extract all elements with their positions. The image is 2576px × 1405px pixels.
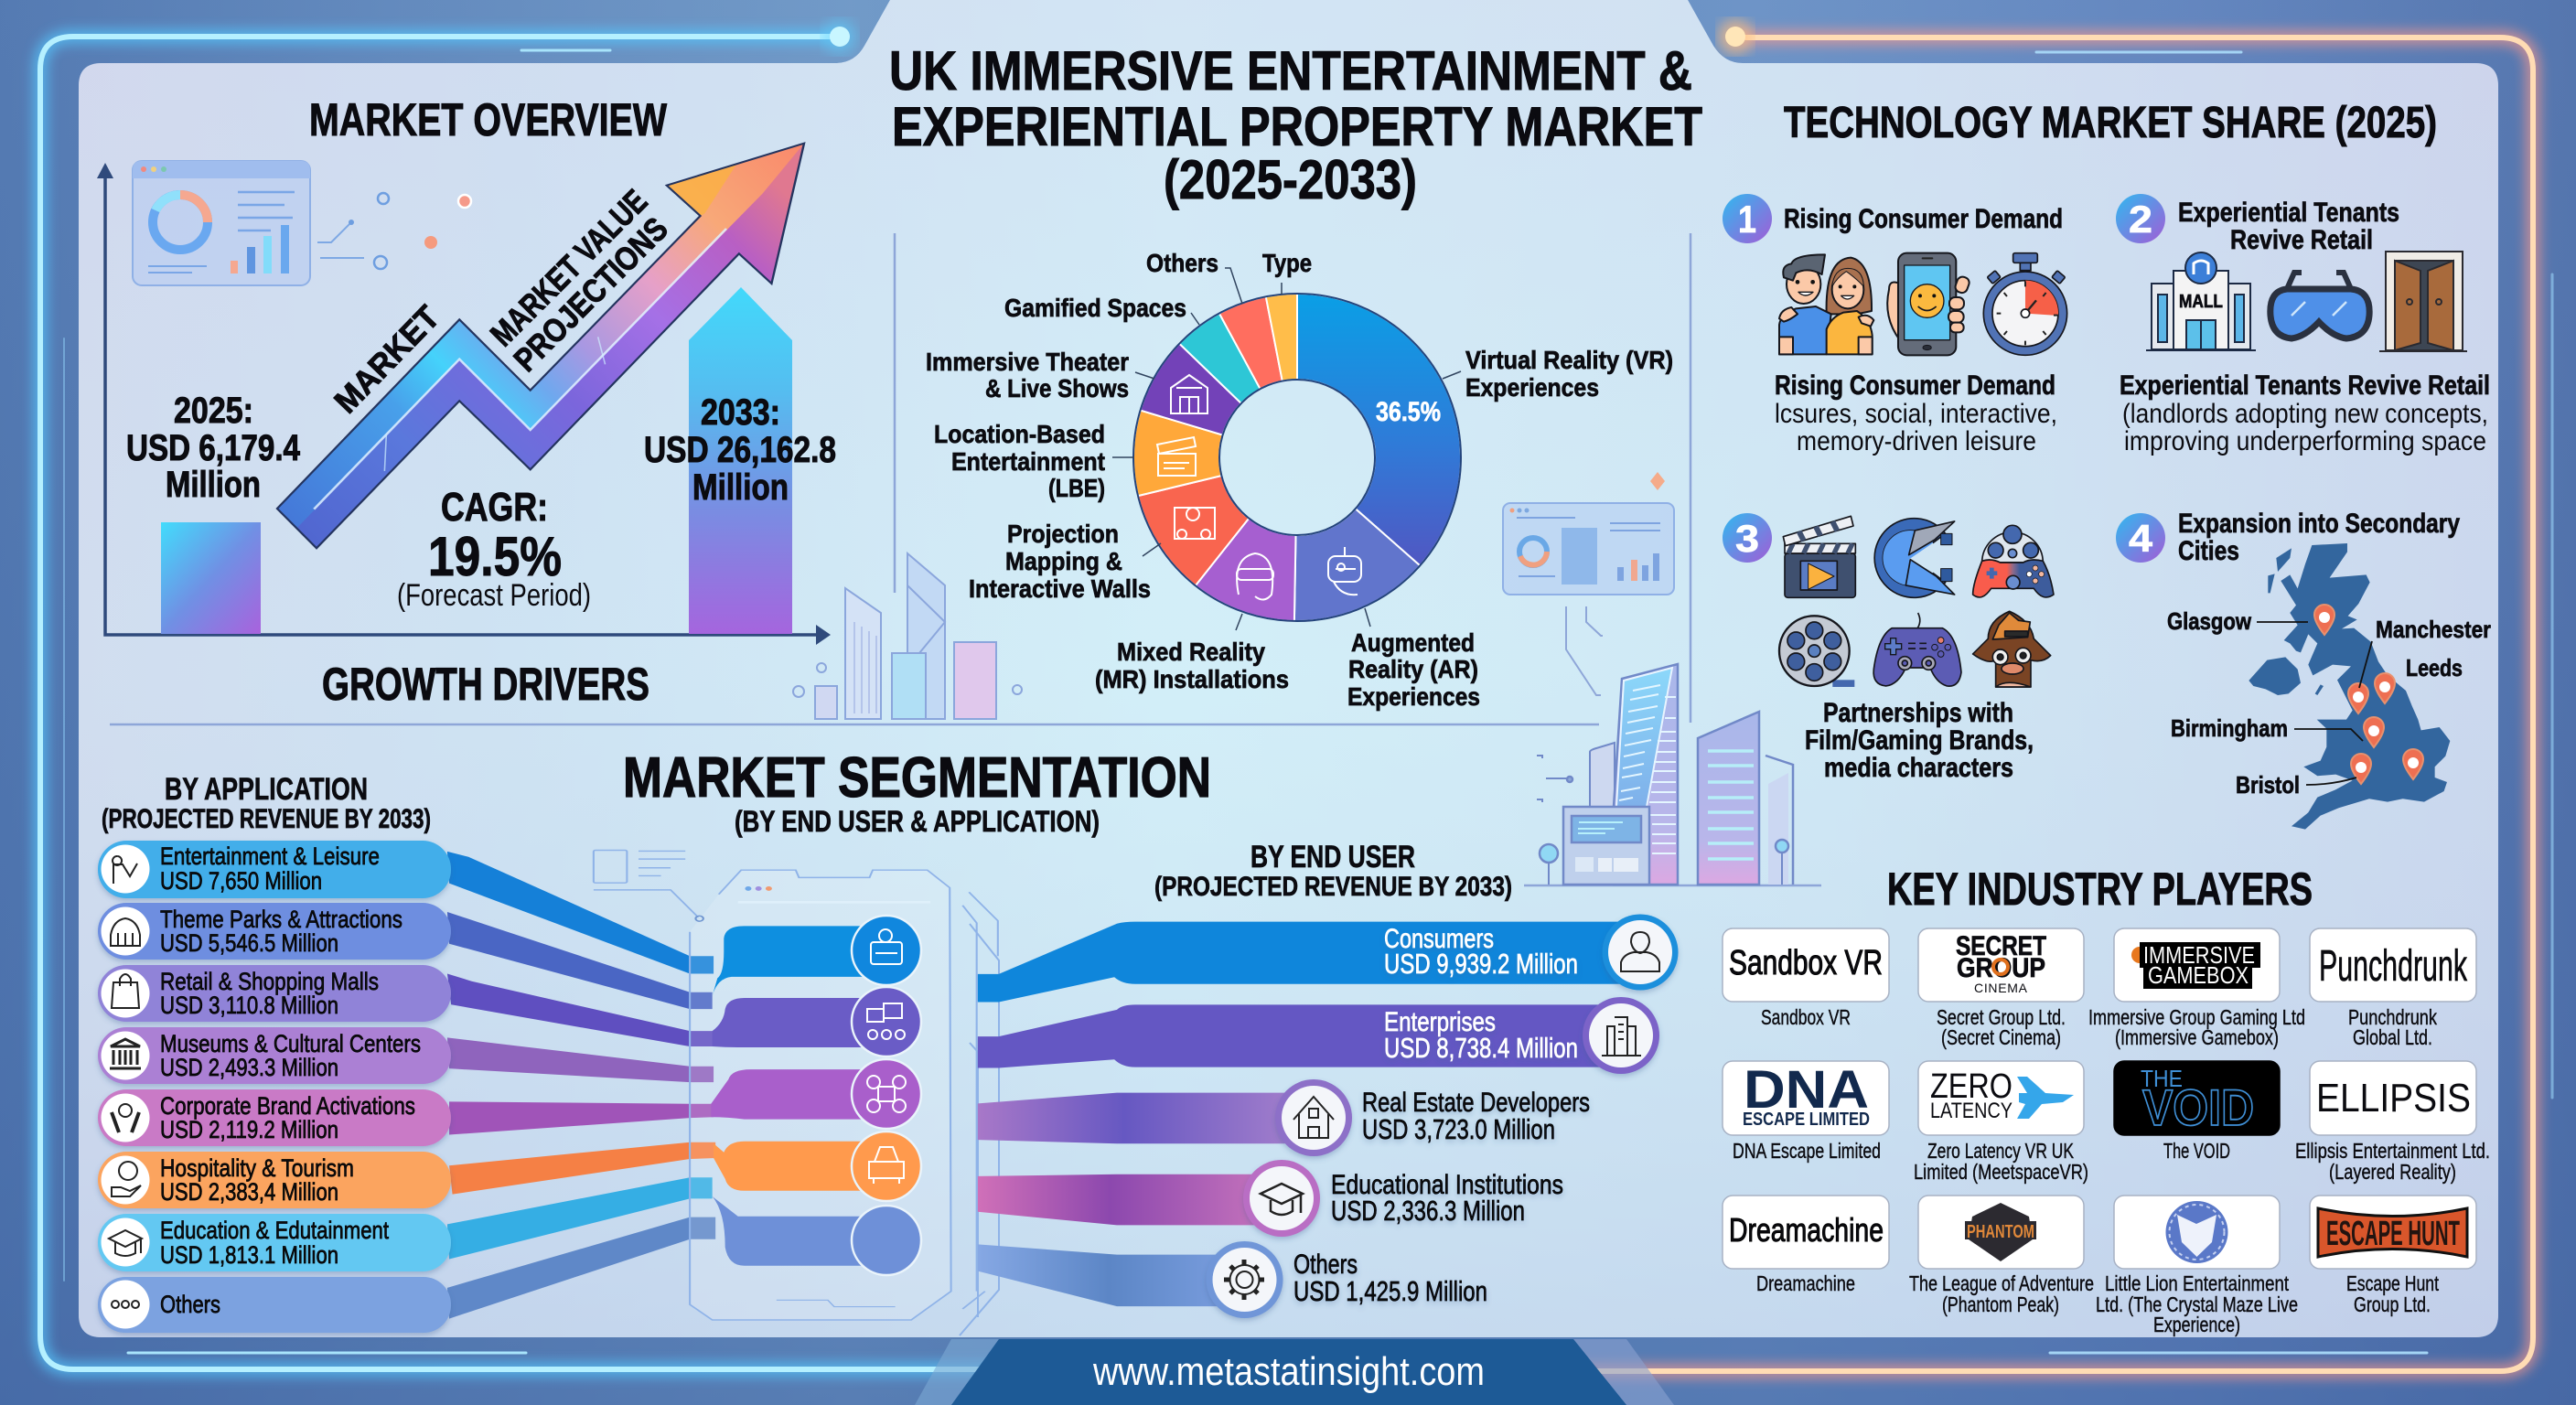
end user: educational institutions: Educational Institutions	[1331, 1170, 1563, 1200]
application pill: education & edutainment	[98, 1214, 451, 1271]
logo: Immersive Gamebox: GAMEBOX	[2148, 961, 2249, 989]
application pill: education & edutainment: USD 1,813.1 Million	[160, 1241, 338, 1269]
heading: by application: BY APPLICATION	[165, 772, 368, 807]
donut labels: Reality (AR)	[1348, 655, 1478, 683]
logo: Escape Hunt	[2318, 1208, 2467, 1257]
application pill: corporate brand activations	[98, 1089, 451, 1146]
heading: by end user: BY END USER	[1250, 840, 1415, 874]
value: 36.5%: 36.5%	[1376, 397, 1441, 427]
player names: Experience)	[2153, 1313, 2240, 1336]
player names: Escape Hunt	[2346, 1271, 2439, 1295]
logo: Phantom Peak	[1965, 1203, 2036, 1261]
dividers	[110, 233, 1821, 885]
player names: Group Ltd.	[2354, 1292, 2431, 1316]
player names: (Immersive Gamebox)	[2115, 1025, 2279, 1049]
arrow labels: MARKET VALUE	[483, 182, 654, 353]
heading: key industry players: KEY INDUSTRY PLAYERS	[1887, 863, 2313, 915]
logo: Secret Group: GROUP	[1957, 953, 2045, 983]
hub bar 1	[713, 926, 886, 996]
text: rising consumer demand: memory-driven leisure	[1797, 426, 2036, 456]
heading: experiential tenants	[2178, 198, 2399, 255]
text: experiential tenants	[2120, 370, 2490, 456]
panel: type donut chart	[926, 249, 1673, 711]
CAGR callout: CAGR:	[441, 485, 548, 530]
badge 2: 2	[2129, 198, 2152, 241]
donut labels: Immersive Theater	[926, 348, 1129, 376]
heading: by end user	[1154, 840, 1512, 902]
arrow labels: MARKET	[327, 298, 446, 420]
end user: others	[1206, 1241, 1487, 1318]
chart axes	[97, 163, 831, 645]
arrow labels	[327, 182, 675, 420]
icon: door	[2379, 252, 2467, 351]
heading: by end user: (PROJECTED REVENUE BY 2033)	[1154, 872, 1512, 902]
map labels: Leeds	[2406, 654, 2463, 681]
icon: VR goggles	[2270, 273, 2369, 338]
end user: enterprises	[1384, 997, 1659, 1074]
donut labels: (MR) Installations	[1095, 665, 1289, 693]
application pill: others: Others	[160, 1291, 220, 1318]
logo: Immersive Gamebox: IMMERSIVE	[2143, 941, 2255, 969]
player names: Dreamachine	[1756, 1271, 1855, 1295]
map pins	[2314, 605, 2423, 784]
application pill: theme parks & attractions: USD 5,546.5 Million	[160, 929, 338, 957]
panel: technology market share	[1723, 99, 2491, 830]
text: partnerships: Partnerships with	[1823, 698, 2013, 728]
map labels: Bristol	[2236, 771, 2300, 799]
heading: expansion into secondary cities	[2178, 509, 2460, 566]
bar: 2025	[161, 522, 261, 634]
hub circles	[852, 916, 921, 1275]
end user: consumers: USD 9,939.2 Million	[1384, 948, 1578, 980]
2025 value	[126, 391, 301, 505]
application pill: museums & cultural centers	[98, 1027, 451, 1084]
application pill: hospitality & tourism: Hospitality & Tourism	[160, 1154, 354, 1182]
donut labels: Projection	[1007, 520, 1119, 548]
map labels: Birmingham	[2171, 714, 2288, 742]
application pill: museums & cultural centers: Museums & Cultural Centers	[160, 1030, 421, 1057]
logo: Zero Latency: ZERO	[1930, 1067, 2012, 1106]
player names: Zero Latency VR UK	[1927, 1139, 2074, 1163]
application pill: theme parks & attractions	[98, 903, 451, 960]
player names: Limited (MeetspaceVR)	[1914, 1160, 2088, 1184]
logo: Phantom Peak: PHANTOM	[1967, 1222, 2034, 1242]
logo: Sandbox VR: Sandbox VR	[1729, 944, 1883, 982]
text: partnerships	[1805, 698, 2034, 783]
heading: experiential tenants: Experiential Tenants	[2178, 198, 2399, 228]
dashboard illustration: right	[1503, 472, 1674, 695]
connector ribbons: left	[447, 852, 715, 1319]
donut labels: Mapping &	[1005, 547, 1122, 575]
heading: technology market share: TECHNOLOGY MARKET SHARE (2025)	[1784, 99, 2437, 147]
hub bar 5	[713, 1196, 886, 1266]
end user: enterprises: USD 8,738.4 Million	[1384, 1032, 1578, 1064]
end user: others: USD 1,425.9 Million	[1293, 1275, 1487, 1307]
application pill: education & edutainment: Education & Edutainment	[160, 1217, 389, 1244]
application pill: hospitality & tourism: USD 2,383,4 Million	[160, 1178, 338, 1206]
heading: market segmentation: MARKET SEGMENTATION	[623, 746, 1211, 810]
player names: Sandbox VR	[1761, 1005, 1851, 1029]
logo: Escape Hunt: ESCAPE HUNT	[2326, 1215, 2460, 1253]
player names: The League of Adventure	[1909, 1271, 2094, 1295]
2033 value: 2033:	[701, 392, 780, 433]
UK map	[2249, 543, 2450, 830]
donut labels: Augmented	[1351, 628, 1475, 657]
end user: real estate developers	[1275, 1079, 1590, 1156]
icon: gamepad	[1873, 613, 1961, 686]
end user: educational institutions: USD 2,336.3 Million	[1331, 1195, 1525, 1227]
2033 value: Million	[692, 467, 789, 508]
CAGR callout	[397, 485, 591, 613]
badge 4	[2116, 513, 2165, 563]
icon: blue crescent logo	[1874, 519, 1955, 597]
icon: couple	[1779, 254, 1873, 354]
heading: expansion into secondary cities: Cities	[2178, 536, 2239, 566]
heading: rising consumer demand: Rising Consumer Demand	[1784, 204, 2063, 234]
badge 4: 4	[2129, 517, 2153, 560]
city illustration: right	[1537, 664, 1793, 885]
icon: character	[1973, 611, 2051, 687]
arrow: rising market trend	[277, 144, 804, 548]
application pill: corporate brand activations: Corporate Brand Activations	[160, 1092, 415, 1120]
2025 value: Million	[166, 465, 261, 505]
right hub outline	[960, 924, 999, 1335]
player names: Immersive Group Gaming Ltd	[2088, 1005, 2305, 1029]
icon: clapperboard	[1783, 516, 1855, 597]
donut labels: Interactive Walls	[969, 574, 1151, 603]
panel: key industry players	[1723, 863, 2490, 1336]
hub bar 2	[713, 998, 886, 1047]
logo: Immersive Gamebox	[2131, 941, 2260, 989]
end user: others: Others	[1293, 1249, 1358, 1280]
end user: real estate developers: USD 3,723.0 Million	[1362, 1113, 1555, 1145]
title: (2025-2033)	[1164, 149, 1417, 210]
end user ribbons	[978, 922, 1624, 1306]
text: partnerships: Film/Gaming Brands,	[1805, 725, 2034, 756]
map labels: Glasgow	[2167, 607, 2252, 635]
application pill: entertainment & leisure: Entertainment & Leisure	[160, 842, 380, 870]
end user: consumers	[1384, 915, 1678, 990]
CAGR callout: 19.5%	[428, 526, 562, 587]
heading: expansion into secondary cities: Expansion into Secondary	[2178, 509, 2460, 539]
donut labels: Experiences	[1465, 373, 1599, 402]
logo: DNA Escape: DNA	[1744, 1060, 1869, 1120]
donut labels: Type	[1262, 249, 1312, 277]
application pill: theme parks & attractions: Theme Parks & Attractions	[160, 906, 402, 933]
logo: The VOID: VOID	[2142, 1078, 2254, 1136]
icon: game controller dome	[1973, 525, 2054, 597]
donut icons	[1157, 375, 1361, 600]
leader lines	[1112, 268, 1461, 630]
player names: (Phantom Peak)	[1942, 1292, 2059, 1316]
map leader lines	[2257, 622, 2372, 785]
2025 value: USD 6,179.4	[126, 428, 301, 468]
panel: market segmentation	[98, 746, 1678, 1335]
heading: market segmentation: (BY END USER & APPLICATION)	[735, 805, 1100, 838]
logo: Punchdrunk: Punchdrunk	[2319, 942, 2468, 991]
application pill: retail & shopping malls: USD 3,110.8 Million	[160, 992, 338, 1019]
player names: DNA Escape Limited	[1733, 1139, 1881, 1163]
CAGR callout: (Forecast Period)	[397, 578, 591, 613]
city illustration: left	[793, 553, 1022, 719]
icon: film reel	[1779, 616, 1854, 687]
application pill: retail & shopping malls: Retail & Shopping Malls	[160, 968, 379, 995]
donut labels: Virtual Reality (VR)	[1465, 346, 1673, 374]
donut labels: Experiences	[1347, 682, 1480, 711]
badge 2	[2116, 194, 2165, 243]
badge 1	[1723, 194, 1772, 243]
logo: The VOID: THE	[2141, 1065, 2183, 1092]
hub bar 3	[711, 1069, 886, 1120]
player names: (Secret Cinema)	[1941, 1025, 2061, 1049]
donut labels: Entertainment	[951, 447, 1105, 476]
application pill: entertainment & leisure	[98, 841, 451, 898]
icon: stopwatch	[1983, 253, 2067, 355]
2033 value: USD 26,162.8	[644, 430, 836, 470]
logo: Dreamachine: Dreamachine	[1729, 1211, 1884, 1249]
end user: real estate developers: Real Estate Developers	[1362, 1088, 1590, 1118]
application pill: entertainment & leisure: USD 7,650 Million	[160, 867, 322, 895]
logo: Zero Latency	[1930, 1067, 2074, 1123]
bar: 2033	[689, 287, 792, 634]
donut labels: (LBE)	[1048, 474, 1105, 502]
donut labels: Location-Based	[934, 420, 1105, 448]
donut labels: Gamified Spaces	[1004, 294, 1186, 322]
heading: market overview: MARKET OVERVIEW	[309, 94, 668, 145]
text: experiential tenants: improving underperforming space	[2124, 426, 2486, 456]
icon: mall	[2146, 252, 2256, 350]
donut segments	[1133, 294, 1461, 621]
icon: mall: MALL	[2179, 292, 2223, 312]
application pill: others	[98, 1277, 451, 1333]
player names	[1733, 1005, 2490, 1336]
title	[889, 40, 1702, 210]
heading: by application	[102, 772, 431, 834]
application pill: corporate brand activations: USD 2,119.2 Million	[160, 1116, 338, 1143]
player names: Punchdrunk	[2348, 1005, 2437, 1029]
arrow labels: PROJECTIONS	[506, 209, 675, 379]
central device hub	[594, 850, 998, 1320]
player names: Ellipsis Entertainment Ltd.	[2295, 1139, 2490, 1163]
donut labels: Others	[1146, 249, 1218, 277]
logo: DNA Escape: ESCAPE LIMITED	[1743, 1110, 1870, 1130]
heading: market segmentation	[623, 746, 1211, 838]
icon: dashboard card	[133, 161, 310, 285]
player names: The VOID	[2163, 1139, 2230, 1163]
player names: Little Lion Entertainment	[2105, 1271, 2289, 1295]
logo: Little Lion	[2166, 1201, 2228, 1263]
hub bar 4	[714, 1142, 886, 1191]
map labels	[2167, 607, 2491, 799]
player names: Global Ltd.	[2353, 1025, 2432, 1049]
logo: Secret Group: SECRET	[1956, 931, 2046, 961]
map labels: Manchester	[2376, 616, 2491, 643]
logo: Secret Group: CINEMA	[1974, 981, 2028, 995]
text: rising consumer demand: Rising Consumer Demand	[1775, 370, 2055, 401]
panel: by end user	[960, 840, 1678, 1335]
text: experiential tenants: Experiential Tenants Revive Retail	[2120, 370, 2490, 401]
title: EXPERIENTIAL PROPERTY MARKET	[892, 96, 1702, 157]
logo: Zero Latency: LATENCY	[1930, 1099, 2012, 1123]
player names: Ltd. (The Crystal Maze Live	[2096, 1292, 2298, 1316]
heading: experiential tenants: Revive Retail	[2230, 225, 2373, 255]
badge 1: 1	[1738, 198, 1756, 241]
player names: Secret Group Ltd.	[1937, 1005, 2066, 1029]
heading: growth drivers: GROWTH DRIVERS	[322, 659, 649, 710]
donut labels: & Live Shows	[985, 374, 1129, 402]
neon frame: left cyan	[40, 18, 1025, 1369]
bottom website tab	[915, 1339, 1674, 1405]
title: UK IMMERSIVE ENTERTAINMENT &	[889, 40, 1692, 102]
badge 3: 3	[1735, 517, 1759, 560]
donut labels: Mixed Reality	[1117, 638, 1265, 666]
badge 3	[1723, 513, 1772, 563]
donut labels	[926, 249, 1673, 711]
player names: (Layered Reality)	[2329, 1160, 2456, 1184]
panel: market overview	[97, 94, 836, 710]
2033 value	[644, 392, 836, 508]
2025 value: 2025:	[174, 391, 253, 431]
text: partnerships: media characters	[1824, 753, 2013, 783]
logo: Secret Group	[1956, 931, 2046, 995]
logo cards	[1723, 928, 2476, 1269]
bottom website tab: www.metastatinsight.com	[1092, 1349, 1485, 1394]
end user: educational institutions	[1243, 1160, 1563, 1237]
text: rising consumer demand	[1775, 370, 2057, 456]
text: experiential tenants: (landlords adopting new concepts,	[2122, 399, 2488, 429]
logo: Ellipsis: ELLIPSIS	[2316, 1076, 2471, 1121]
text: rising consumer demand: lcsures, social, interactive,	[1775, 399, 2057, 429]
heading: by application: (PROJECTED REVENUE BY 2033)	[102, 804, 431, 834]
neon frame: right orange	[1561, 18, 2552, 1371]
decorative nodes	[317, 193, 471, 269]
icon: phone with smiley	[1887, 253, 1970, 355]
application pill: hospitality & tourism	[98, 1152, 451, 1208]
end user: enterprises: Enterprises	[1384, 1007, 1496, 1037]
application pill: museums & cultural centers: USD 2,493.3 Million	[160, 1054, 338, 1081]
end user: consumers: Consumers	[1384, 924, 1494, 954]
application pill: retail & shopping malls	[98, 965, 451, 1022]
